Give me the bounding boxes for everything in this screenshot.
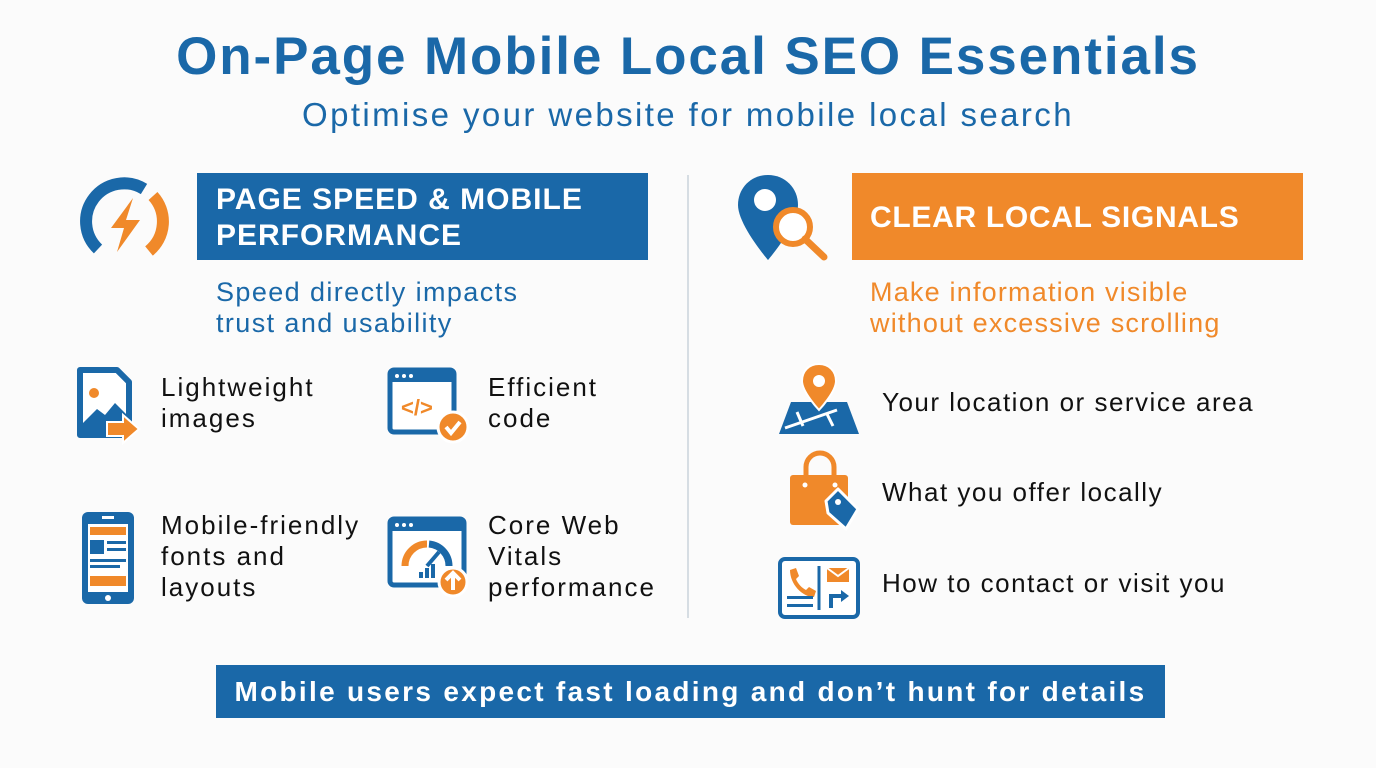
subheading: trust and usability (216, 308, 453, 338)
icon: speed gauge (80, 177, 169, 256)
item: efficient code: Efficient (488, 372, 598, 402)
item: mobile-friendly: Mobile-friendly (161, 510, 360, 540)
item: mobile-friendly: fonts and (161, 541, 286, 571)
title: On-Page Mobile Local SEO Essentials (176, 27, 1200, 86)
item: efficient code (388, 368, 598, 440)
icon: pin with magnifier (738, 175, 828, 260)
item: location: Your location or service area (882, 387, 1254, 417)
item: efficient code: </> (401, 395, 433, 420)
header box (852, 173, 1303, 260)
header box: CLEAR LOCAL SIGNALS (870, 201, 1239, 234)
item: offer: What you offer locally (882, 477, 1163, 507)
item: lightweight images: Lightweight (161, 372, 315, 402)
item: core web vitals (388, 510, 656, 602)
item: lightweight images (77, 367, 315, 441)
bottom banner (216, 665, 1165, 718)
panel: page speed (77, 173, 656, 604)
item: location (779, 365, 1254, 434)
subheading: Make information visible (870, 277, 1188, 307)
item: mobile-friendly: layouts (161, 572, 257, 602)
subheading: Speed directly impacts (216, 277, 518, 307)
item: core web vitals: Vitals (488, 541, 563, 571)
item: efficient code: code (488, 403, 552, 433)
item: mobile-friendly (82, 510, 360, 604)
item: contact: How to contact or visit you (882, 568, 1226, 598)
item: core web vitals: Core Web (488, 510, 621, 540)
header box: PAGE SPEED & MOBILE (216, 183, 583, 216)
subheading (870, 277, 1221, 338)
header box: PERFORMANCE (216, 219, 462, 252)
panel: local signals (738, 173, 1303, 619)
item: offer (790, 450, 1163, 527)
item: lightweight images: images (161, 403, 257, 433)
item: contact (778, 557, 1226, 619)
bottom banner: Mobile users expect fast loading and don’t hunt for details (234, 676, 1146, 707)
subheading (216, 277, 518, 338)
subtitle: Optimise your website for mobile local search (302, 96, 1074, 133)
subheading: without excessive scrolling (870, 308, 1221, 338)
item: core web vitals: performance (488, 572, 656, 602)
header box (197, 173, 648, 260)
